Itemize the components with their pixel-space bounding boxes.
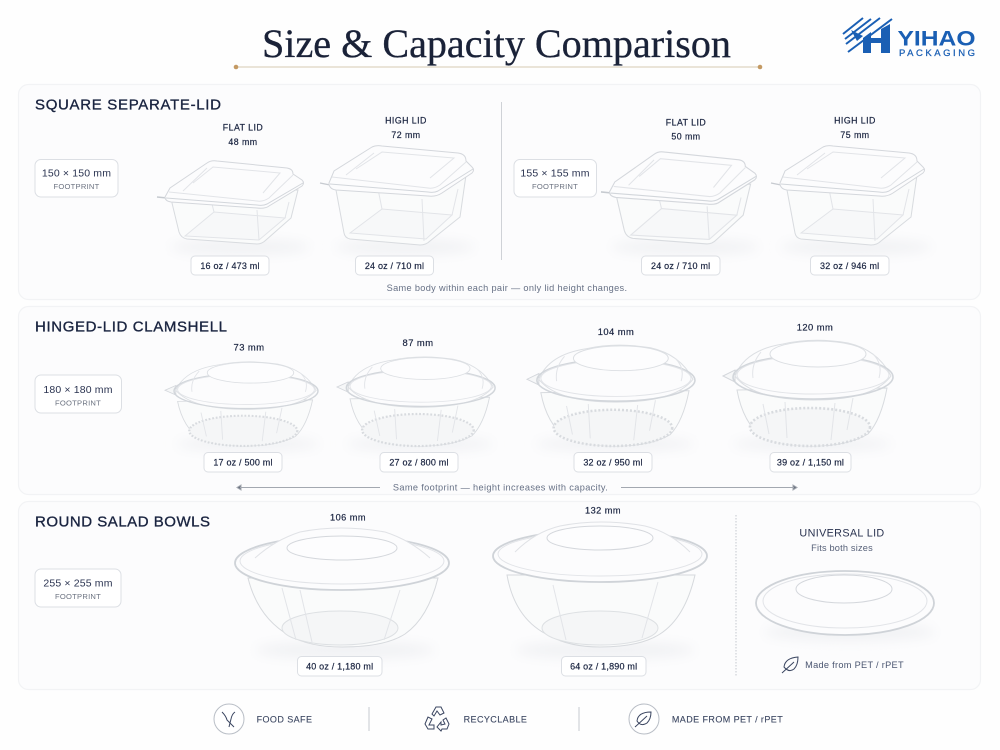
- container: high lid 75 mm: [771, 116, 932, 255]
- arrow: left: [237, 485, 380, 490]
- container: flat lid 48 mm: 48 mm: [228, 137, 258, 147]
- footer: recyclable: RECYCLABLE: [464, 714, 527, 724]
- universal lid: UNIVERSAL LID: [799, 528, 885, 540]
- icon: recycle: [425, 707, 449, 731]
- icon: fork and knife: [214, 704, 244, 734]
- capacity: 32 oz: [574, 452, 652, 472]
- clamshell 73 mm: [165, 342, 320, 451]
- capacity: 32 oz: [810, 256, 889, 275]
- container: high lid 72 mm: HIGH LID: [385, 116, 427, 126]
- clamshell 120 mm: [723, 322, 893, 451]
- clamshell 104 mm: 104 mm: [598, 326, 634, 337]
- logo: Yihao Packaging: YIHAO: [898, 28, 976, 50]
- capacity: 64 oz: 64 oz / 1,890 ml: [570, 662, 637, 672]
- universal lid: [756, 528, 936, 641]
- container: flat lid 48 mm: [157, 122, 310, 255]
- bowl 132 mm: [493, 506, 707, 659]
- capacity: 27 oz: [380, 452, 458, 472]
- panel: round salad bowls: [18, 502, 980, 690]
- heading: square separate-lid: SQUARE SEPARATE-LID: [35, 96, 221, 114]
- capacity: 24 oz: [356, 256, 434, 275]
- panel: square separate-lid: [18, 84, 980, 300]
- footprint 180 x 180 mm: FOOTPRINT: [55, 398, 101, 408]
- footprint 255 x 255 mm: [35, 569, 121, 607]
- logo: Yihao Packaging: [843, 18, 976, 59]
- capacity: 40 oz: [298, 656, 382, 676]
- note: same body: Same body within each pair — only lid height changes.: [387, 283, 627, 293]
- capacity: 16 oz: [191, 256, 269, 275]
- bowl 106 mm: 106 mm: [330, 512, 366, 522]
- capacity: 39 oz: [770, 452, 851, 472]
- text: made from PET: Made from PET / rPET: [805, 660, 904, 670]
- logo: Yihao Packaging: PACKAGING: [899, 48, 975, 59]
- footprint 255 x 255 mm: 255 × 255 mm: [43, 578, 113, 590]
- capacity: 17 oz: [204, 452, 282, 472]
- footprint 155 x 155 mm: 155 × 155 mm: [520, 168, 590, 180]
- footprint 255 x 255 mm: FOOTPRINT: [55, 592, 101, 601]
- container: flat lid 50 mm: FLAT LID: [666, 118, 706, 128]
- capacity: 32 oz: 32 oz / 946 ml: [820, 261, 879, 271]
- clamshell 87 mm: [337, 337, 495, 451]
- container: flat lid 50 mm: [601, 118, 759, 255]
- capacity: 64 oz: [562, 656, 646, 676]
- bowl 132 mm: 132 mm: [585, 506, 621, 516]
- container: flat lid 48 mm: FLAT LID: [223, 122, 263, 132]
- capacity: 32 oz: 32 oz / 950 ml: [583, 458, 643, 468]
- capacity: 40 oz: 40 oz / 1,180 ml: [306, 662, 373, 672]
- title: Size & Capacity Comparison: [262, 21, 731, 66]
- clamshell 73 mm: 73 mm: [234, 342, 264, 352]
- footprint 150 x 150 mm: [35, 160, 118, 197]
- capacity: 39 oz: 39 oz / 1,150 ml: [777, 458, 844, 468]
- clamshell 120 mm: 120 mm: [797, 322, 833, 332]
- capacity: 24 oz: 24 oz / 710 ml: [365, 261, 424, 271]
- panel: hinged-lid clamshell: [18, 306, 980, 494]
- capacity: 24 oz: [642, 256, 720, 275]
- arrow: right: [621, 485, 797, 490]
- clamshell 104 mm: [527, 326, 695, 451]
- capacity: 27 oz: 27 oz / 800 ml: [389, 458, 449, 468]
- footer: made from PET / rPET: MADE FROM PET / rPET: [672, 714, 783, 724]
- container: flat lid 50 mm: 50 mm: [671, 132, 701, 142]
- footer: food safe: [214, 704, 312, 734]
- capacity: 17 oz: 17 oz / 500 ml: [213, 458, 273, 468]
- capacity: 24 oz: 24 oz / 710 ml: [651, 261, 710, 271]
- footprint 180 x 180 mm: [35, 375, 122, 413]
- footprint 155 x 155 mm: FOOTPRINT: [532, 182, 578, 191]
- icon: leaf in circle: [629, 704, 659, 734]
- note: same footprint: Same footprint — height increases with capacity.: [393, 482, 608, 492]
- container: high lid 72 mm: [320, 116, 475, 255]
- footprint 150 x 150 mm: 150 × 150 mm: [42, 168, 111, 180]
- container: high lid 72 mm: 72 mm: [391, 130, 421, 140]
- footprint 180 x 180 mm: 180 × 180 mm: [43, 384, 113, 396]
- footprint 155 x 155 mm: [514, 160, 596, 197]
- footer: made from PET / rPET: [629, 704, 783, 734]
- clamshell 87 mm: 87 mm: [403, 337, 433, 348]
- footprint 150 x 150 mm: FOOTPRINT: [53, 182, 100, 191]
- heading: hinged-lid clamshell: HINGED-LID CLAMSHELL: [35, 318, 227, 336]
- footer: recyclable: [425, 707, 527, 731]
- bowl 106 mm: [235, 512, 449, 659]
- capacity: 16 oz: 16 oz / 473 ml: [200, 261, 260, 271]
- container: high lid 75 mm: 75 mm: [840, 130, 870, 140]
- icon: leaf: [782, 657, 798, 673]
- container: high lid 75 mm: HIGH LID: [834, 116, 876, 126]
- heading: round salad bowls: ROUND SALAD BOWLS: [35, 514, 210, 530]
- footer: food safe: FOOD SAFE: [257, 714, 312, 724]
- universal lid: Fits both sizes: [811, 543, 873, 553]
